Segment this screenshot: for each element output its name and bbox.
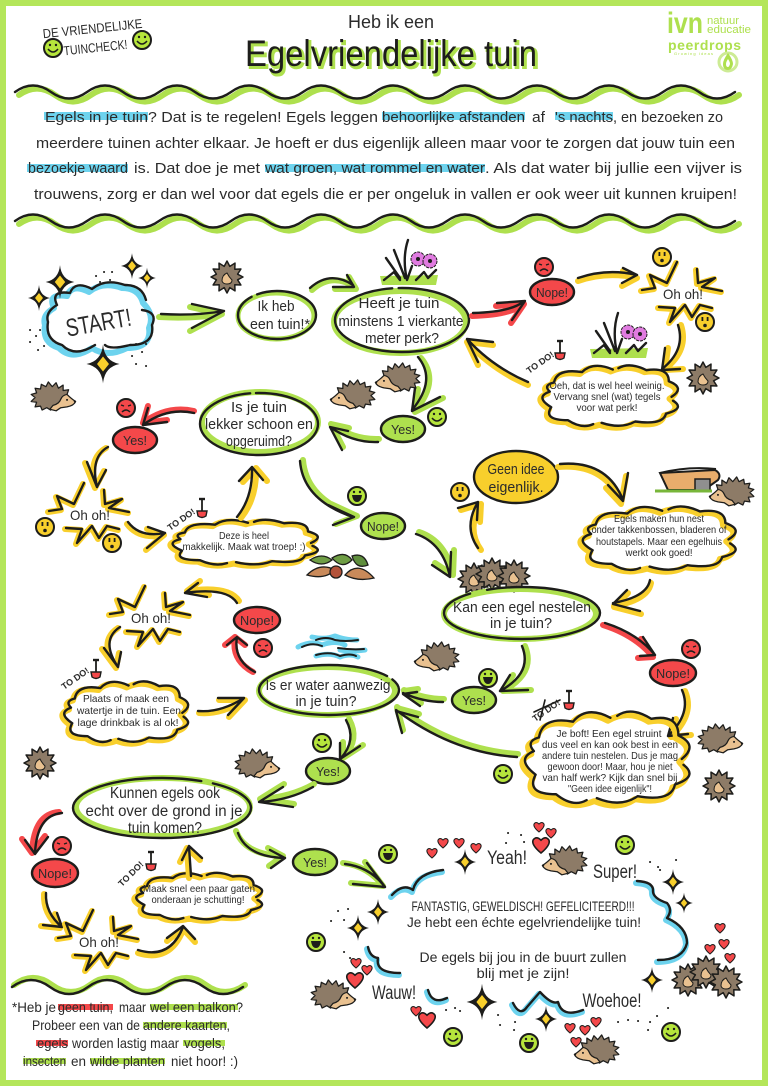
laugh xyxy=(348,487,366,505)
celebration text: blij met je zijn! xyxy=(476,966,570,981)
header tagline: de vriendelijke tuincheck: DE VRIENDELIJKE xyxy=(42,16,143,41)
hedgehog ball top xyxy=(211,261,243,293)
intro paragraph xyxy=(27,109,742,203)
to do 3 xyxy=(60,660,101,692)
hedgehog ball right lower xyxy=(703,770,735,802)
intro paragraph: , en bezoeken zo xyxy=(613,109,723,126)
footnote: worden lastig maar xyxy=(71,1035,179,1051)
node: is je tuin schoon: opgeruimd? xyxy=(226,433,292,450)
arrow: yes to is er water xyxy=(403,689,444,706)
logos: ivn and peerdrops: natuur xyxy=(707,15,739,27)
arrow: cloud back to heeft xyxy=(467,339,528,385)
cloud: je boft: Je boft! Een egel struint xyxy=(556,728,662,740)
smile xyxy=(428,408,446,426)
hedgehog ball right xyxy=(687,362,719,394)
arrow: nope to oh oh 3 xyxy=(185,581,239,603)
intro paragraph: . Als dat water bij jullie een vijver is xyxy=(485,160,742,177)
arrow: oh oh to plaats xyxy=(102,627,121,668)
arrow: nope to je boft xyxy=(668,690,691,737)
celebration cloud outline xyxy=(367,870,687,1015)
celebration text: Je hebt een échte egelvriendelijke tuin! xyxy=(407,915,641,930)
cloud: plaats watertje: watertje in de tuin. Een xyxy=(76,705,181,717)
celebration text: De egels bij jou in de buurt zullen xyxy=(420,950,626,965)
footnote: egels xyxy=(37,1035,68,1051)
celebration text: FANTASTIG, GEWELDISCH! GEFELICITEERD!!! xyxy=(412,899,634,914)
cloud: plaats watertje: lage drinkbak is al ok! xyxy=(78,717,178,729)
title: Heb ik een xyxy=(348,12,434,32)
cloud: je boft: andere tuin nestelen. Dus je mag xyxy=(542,750,678,762)
cloud: je boft xyxy=(522,712,690,806)
arrow: yes to is je tuin xyxy=(330,424,379,450)
node: geen idee eigenlijk xyxy=(474,451,558,503)
leaves pile xyxy=(307,554,374,579)
node: kunnen egels: Kunnen egels ook xyxy=(110,785,220,802)
cloud: maak gaten: Maak snel een paar gaten xyxy=(143,883,255,895)
intro paragraph: wat groen, wat rommel en water xyxy=(264,160,485,177)
cloud: maak gaten xyxy=(134,873,262,921)
logos: ivn and peerdrops: educatie xyxy=(707,24,751,36)
arrow: yes to celebration xyxy=(343,862,385,887)
plants above cloud xyxy=(590,313,648,358)
intro paragraph: af xyxy=(532,109,546,126)
laugh 2 xyxy=(479,669,497,687)
arrow: is er water to yes xyxy=(340,719,363,759)
arrow: heeft to nope xyxy=(472,301,525,323)
arrow: nope to kan een egel xyxy=(416,532,454,577)
oh oh burst 2 xyxy=(36,483,129,552)
node: is je tuin schoon: lekker schoon en xyxy=(205,416,313,433)
node: is er water xyxy=(259,665,399,715)
footnote: *Heb je xyxy=(12,999,56,1015)
celebration smileys xyxy=(307,836,680,1052)
cloud: oeh weinig: voor wat perk! xyxy=(576,402,638,414)
node: kan een egel nestelen: Kan een egel nestelen xyxy=(453,599,591,616)
node: heeft je tuin perk xyxy=(334,288,469,353)
logos: ivn and peerdrops xyxy=(667,7,751,71)
node: ik heb een tuin xyxy=(238,291,316,339)
title: Egelvriendelijke tuin xyxy=(247,35,539,76)
arrow: maak to kunnen xyxy=(180,846,202,878)
cloud: oeh weinig: Vervang snel (wat) tegels xyxy=(554,391,660,403)
footnote: maar xyxy=(119,999,146,1015)
arrow: kunnen to yes xyxy=(236,831,285,868)
node: nope red 3: Nope! xyxy=(240,613,274,628)
hedgehog house xyxy=(655,468,719,491)
to do 2 xyxy=(166,499,207,533)
footnote: geen tuin, xyxy=(58,999,113,1015)
footnote: wel een balkon? xyxy=(149,999,243,1015)
cloud: je boft: van half werk? Kijk dan snel bij xyxy=(542,772,678,784)
node: heeft je tuin perk: Heeft je tuin xyxy=(358,295,440,312)
to do struck through xyxy=(531,691,574,724)
intro paragraph: 's nachts xyxy=(555,109,613,126)
to do 4: TO DO! xyxy=(116,859,145,888)
arrow: geen idee to egels maken xyxy=(558,464,628,504)
plants above heeft xyxy=(380,240,438,285)
arrow: oh oh to maak xyxy=(138,926,195,955)
header tagline: de vriendelijke tuincheck xyxy=(42,16,151,58)
start sparkles xyxy=(28,253,156,384)
node: nope red 2 xyxy=(650,660,696,686)
exclamations xyxy=(372,848,642,1012)
hedgehog center right xyxy=(414,642,459,671)
cloud: egels maken nest: onder takkenbossen, bladeren of xyxy=(592,524,727,536)
oh oh burst 3 xyxy=(109,586,190,647)
footnote: en xyxy=(71,1053,86,1069)
to do struck through: TO DO! xyxy=(531,697,562,724)
node: is je tuin schoon xyxy=(200,392,318,455)
node: heeft je tuin perk: meter perk? xyxy=(365,330,439,347)
node: geen idee eigenlijk: Geen idee xyxy=(488,462,544,478)
hedgehog left xyxy=(31,382,76,411)
footnote xyxy=(12,999,243,1069)
node: kan een egel nestelen xyxy=(444,587,600,639)
arrow: is je tuin to nope xyxy=(300,460,357,525)
cloud: je boft: gewoon door! Maar, hou je niet xyxy=(548,761,673,773)
logos: ivn and peerdrops: peerdrops xyxy=(668,37,741,53)
arrow: deze to is je tuin xyxy=(237,467,267,518)
sad face 3 xyxy=(682,640,700,658)
cloud: je boft: dus veel en kan ook best in een xyxy=(542,739,678,751)
hedgehog at house xyxy=(709,477,754,506)
arrow: start to ik heb xyxy=(159,304,224,331)
node: nope 1: Nope! xyxy=(536,285,568,300)
cloud: plaats watertje xyxy=(62,681,188,744)
node: nope red 2: Nope! xyxy=(656,666,690,681)
node: yes 1 xyxy=(381,416,425,442)
logos: ivn and peerdrops: Growing ideas xyxy=(674,51,713,56)
arrow: kunnen to nope red xyxy=(22,812,62,854)
arrow: yes to kunnen xyxy=(259,784,314,807)
node: heeft je tuin perk: minstens 1 vierkante xyxy=(338,313,464,330)
start cloud: START! xyxy=(64,304,134,343)
oh oh burst 1 xyxy=(641,248,722,331)
arrow: ik heb to heeft xyxy=(310,275,356,290)
to do 1: TO DO! xyxy=(525,349,556,376)
water waves xyxy=(298,636,365,657)
node: is er water: Is er water aanwezig xyxy=(266,677,390,694)
to do 4 xyxy=(116,852,156,888)
smile 3 xyxy=(313,734,331,752)
hedgehog mid 2 xyxy=(330,380,375,409)
cloud: egels maken nest: Egels maken hun nest xyxy=(614,513,704,525)
arrow: kan to nope red xyxy=(603,623,655,658)
node: yes 2: Yes! xyxy=(462,693,486,708)
node: ik heb een tuin: een tuin!* xyxy=(250,317,310,333)
arrow: yes to oh oh xyxy=(85,447,108,488)
wow face xyxy=(451,483,469,501)
footnote: wilde planten xyxy=(89,1053,165,1069)
exclamations: Yeah! xyxy=(487,848,527,869)
node: kunnen egels: tuin komen? xyxy=(128,820,202,837)
cloud: je boft: "Geen idee eigenlijk"! xyxy=(568,783,652,795)
cloud: egels maken nest: werkt ook goed! xyxy=(625,547,692,559)
exclamations: Super! xyxy=(593,862,637,883)
exclamations: Woehoe! xyxy=(582,991,642,1012)
hedgehog right xyxy=(698,724,743,753)
celebration text xyxy=(407,899,641,981)
footnote: andere kaarten, xyxy=(143,1017,230,1033)
cloud: plaats watertje: Plaats of maak een xyxy=(83,693,169,705)
node: nope red 4: Nope! xyxy=(38,866,72,881)
celebration sparkles xyxy=(331,833,693,1032)
arrow: nope to oh oh 4 xyxy=(41,893,62,928)
celebration hedgehogs xyxy=(311,846,742,1064)
cloud: oeh weinig xyxy=(540,365,678,428)
node: yes 3 xyxy=(306,758,350,784)
node: yes 2 xyxy=(452,687,496,713)
node: yes 3: Yes! xyxy=(316,764,340,779)
footnote: insecten xyxy=(23,1053,66,1069)
sad face xyxy=(535,258,553,276)
oh oh burst 4 xyxy=(57,910,138,971)
oh oh burst 2: Oh oh! xyxy=(70,507,110,523)
arrow: is je tuin to yes red xyxy=(143,406,194,425)
node: kunnen egels xyxy=(73,778,251,838)
node: yes red xyxy=(113,427,157,453)
cloud: deze makkelijk xyxy=(170,520,318,566)
to do 3: TO DO! xyxy=(60,665,91,692)
node: nope green: Nope! xyxy=(367,519,399,534)
node: kan een egel nestelen: in je tuin? xyxy=(490,615,552,632)
intro paragraph: meerdere tuinen achter elkaar. Je hoeft er dus eigenlijk alleen maar voor te zorgen dat jouw tuin een xyxy=(36,135,735,152)
arrow: nope to oh oh xyxy=(578,268,637,286)
node: is je tuin schoon: Is je tuin xyxy=(231,399,287,416)
cloud: egels maken nest xyxy=(580,506,736,572)
oh oh burst 3: Oh oh! xyxy=(131,610,171,626)
header tagline: de vriendelijke tuincheck: TUINCHECK! xyxy=(63,37,128,58)
oh oh burst 1: Oh oh! xyxy=(663,286,703,302)
footnote: Probeer een van de xyxy=(32,1017,140,1033)
arrow: egels maken to kan xyxy=(613,580,651,614)
cloud: deze makkelijk: makkelijk. Maak wat troep! :) xyxy=(182,541,306,553)
node: nope red 4 xyxy=(32,859,78,887)
arrow: heeft to yes xyxy=(412,357,443,412)
intro paragraph: behoorlijke afstanden xyxy=(382,109,525,126)
bottom wavy divider xyxy=(12,978,245,994)
sad face 2 xyxy=(117,399,135,417)
hedgehog group above kan xyxy=(458,558,530,595)
cloud: maak gaten: onderaan je schutting! xyxy=(152,894,244,906)
cloud: egels maken nest: houtstapels. Maar een egelhuis xyxy=(596,536,722,548)
arrow: kan to yes xyxy=(500,646,531,691)
to do 1 xyxy=(525,341,565,376)
cloud: oeh weinig: Oeh, dat is wel heel weinig. xyxy=(550,380,664,392)
arrow: plaats to is er water xyxy=(198,698,245,717)
top wavy divider xyxy=(15,86,739,102)
node: geen idee eigenlijk: eigenlijk. xyxy=(488,480,544,496)
start cloud xyxy=(44,282,154,354)
oh oh burst 4: Oh oh! xyxy=(79,934,119,950)
node: yes 4 xyxy=(293,849,337,875)
second wavy divider xyxy=(15,214,739,230)
hedgehog ball left xyxy=(24,747,56,779)
node: nope red 3 xyxy=(234,607,280,633)
arrow: is er water to nope xyxy=(225,637,255,672)
exclamations: Wauw! xyxy=(372,983,416,1004)
intro paragraph: ? Dat is te regelen! Egels leggen xyxy=(148,109,378,126)
footnote: niet hoor! :) xyxy=(171,1053,238,1069)
cloud: deze makkelijk: Deze is heel xyxy=(219,530,269,542)
intro paragraph: bezoekje waard xyxy=(28,160,128,177)
node: ik heb een tuin: Ik heb xyxy=(258,299,294,315)
footnote: vogels, xyxy=(184,1035,225,1051)
node: yes 4: Yes! xyxy=(303,855,327,870)
intro paragraph: Egels in je tuin xyxy=(45,109,148,126)
intro paragraph: is. Dat doe je met xyxy=(134,160,261,177)
node: kunnen egels: echt over de grond in je xyxy=(86,803,242,820)
node: nope green xyxy=(361,513,405,539)
title: Egelvriendelijke tuin xyxy=(245,33,537,74)
sad face 4 xyxy=(254,639,272,657)
intro paragraph: trouwens, zorg er dan wel voor dat egels die er per ongeluk in vallen er ook weer uit kunnen kruipen! xyxy=(34,186,737,203)
arrow: oh oh to oeh cloud xyxy=(662,325,683,370)
arrow: kan to geen idee xyxy=(458,502,481,550)
hedgehog mid xyxy=(375,363,420,392)
node: nope 1 xyxy=(530,279,574,305)
node: yes 1: Yes! xyxy=(391,422,415,437)
sad face 5 xyxy=(53,837,71,855)
celebration hearts xyxy=(347,822,735,1047)
title xyxy=(245,12,539,76)
logos: ivn and peerdrops: ivn xyxy=(667,7,703,40)
arrow: je boft to is er water xyxy=(396,707,518,757)
to do 2: TO DO! xyxy=(166,506,197,533)
node: is er water: in je tuin? xyxy=(296,693,356,710)
node: yes red: Yes! xyxy=(123,433,147,448)
arrow: oh oh to deze xyxy=(127,522,165,550)
hedgehog over kunnen xyxy=(235,749,280,778)
smile 2 xyxy=(494,765,512,783)
